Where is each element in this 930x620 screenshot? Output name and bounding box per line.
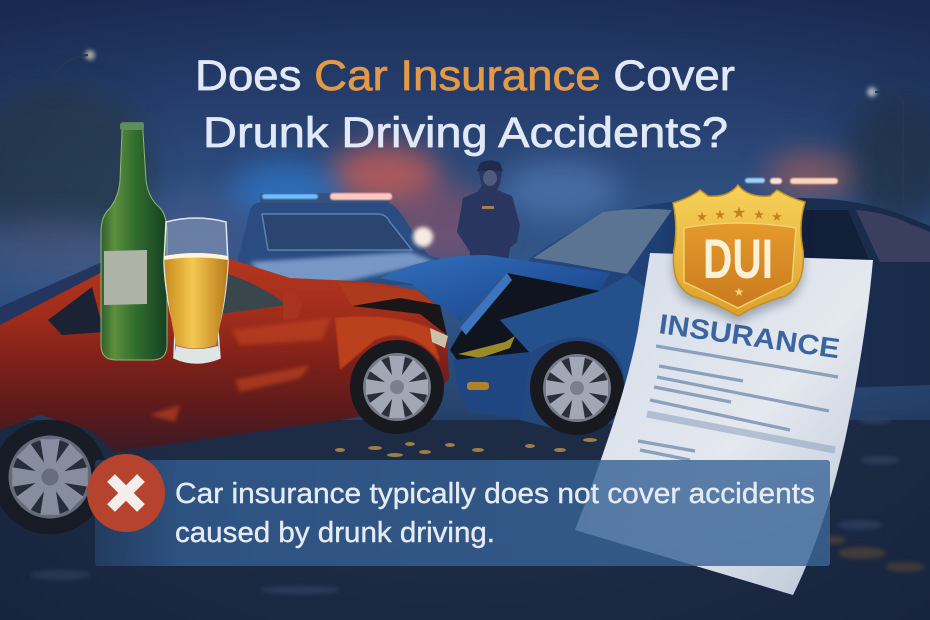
badge stars: ★ (753, 207, 765, 222)
hood fold (460, 273, 512, 335)
blue car side windows (800, 210, 930, 262)
police lights glow (230, 145, 855, 265)
callout banner: caused by drunk driving. (175, 517, 495, 549)
title line two: Drunk Driving Accidents? (203, 109, 728, 157)
badge stars: ★ (696, 209, 708, 224)
red car front window (220, 272, 287, 314)
red car roof (0, 263, 106, 325)
red hood shine (335, 316, 440, 370)
red car rear window (48, 287, 104, 335)
callout text: Car insurance typically does not cover accidents (175, 478, 815, 510)
badge stars: ★ (771, 209, 783, 224)
police lights on rear car (745, 178, 838, 184)
police car in background (238, 193, 450, 285)
badge stars (696, 205, 783, 299)
blue car front wheel (530, 341, 624, 435)
DUI badge (673, 185, 805, 323)
red car mirror (283, 292, 302, 320)
blue car windshield (533, 209, 672, 274)
crumpled blue hood (380, 255, 610, 322)
icon: red X circle (87, 454, 165, 532)
debris on road (335, 438, 597, 457)
badge stars: ★ (734, 285, 744, 299)
red car rear wheel (0, 420, 107, 534)
icon: glass of beer (164, 218, 228, 363)
title line one: Does Car Insurance Cover (195, 52, 735, 100)
red car (0, 258, 449, 452)
red car body (0, 258, 449, 452)
badge stars: ★ (732, 205, 746, 222)
icon: beer bottle (101, 123, 167, 360)
badge stars: ★ (714, 207, 726, 222)
document heading: INSURANCE (657, 308, 842, 364)
badge text: DUI (703, 227, 773, 290)
callout banner (87, 454, 830, 566)
crushed engine bay (450, 273, 600, 360)
blue fender (500, 275, 650, 400)
door reflections (150, 318, 330, 422)
broken headlight (458, 336, 515, 358)
document: insurance policy (575, 253, 873, 595)
blue car rear body (500, 198, 930, 430)
document text lines (638, 346, 838, 460)
police officer silhouette (457, 160, 520, 262)
blue bumper (453, 352, 530, 418)
blue car (380, 198, 930, 430)
title (195, 52, 735, 157)
bottle label (104, 250, 147, 305)
red car front wheel (350, 340, 444, 434)
